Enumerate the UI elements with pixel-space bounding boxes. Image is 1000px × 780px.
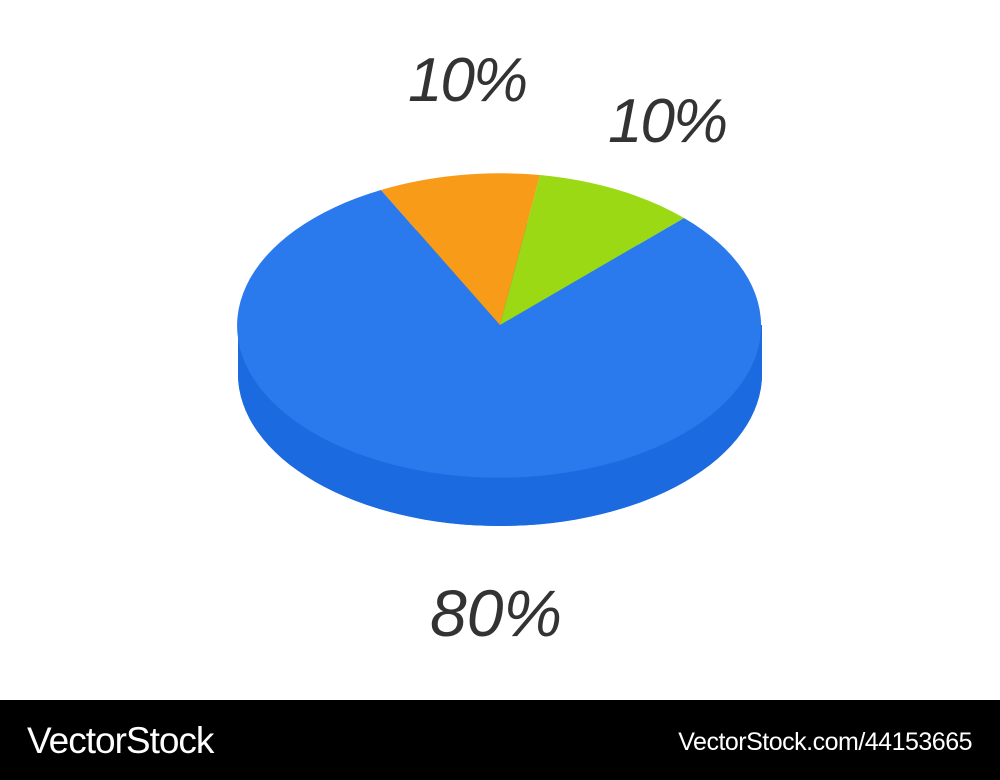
label: blue 80%: 80% [430, 576, 562, 650]
label: green 10%: 10% [608, 87, 726, 156]
image id text: VectorStock.com/44153665 [678, 728, 972, 756]
footer bar [0, 700, 1000, 780]
slice: blue 80% [237, 190, 761, 478]
brand logo text: VectorStock [27, 720, 213, 761]
slice: green 10% [500, 175, 684, 325]
pie side [238, 222, 762, 526]
slice: orange 10% [381, 173, 540, 325]
label: orange 10%: 10% [408, 46, 526, 115]
